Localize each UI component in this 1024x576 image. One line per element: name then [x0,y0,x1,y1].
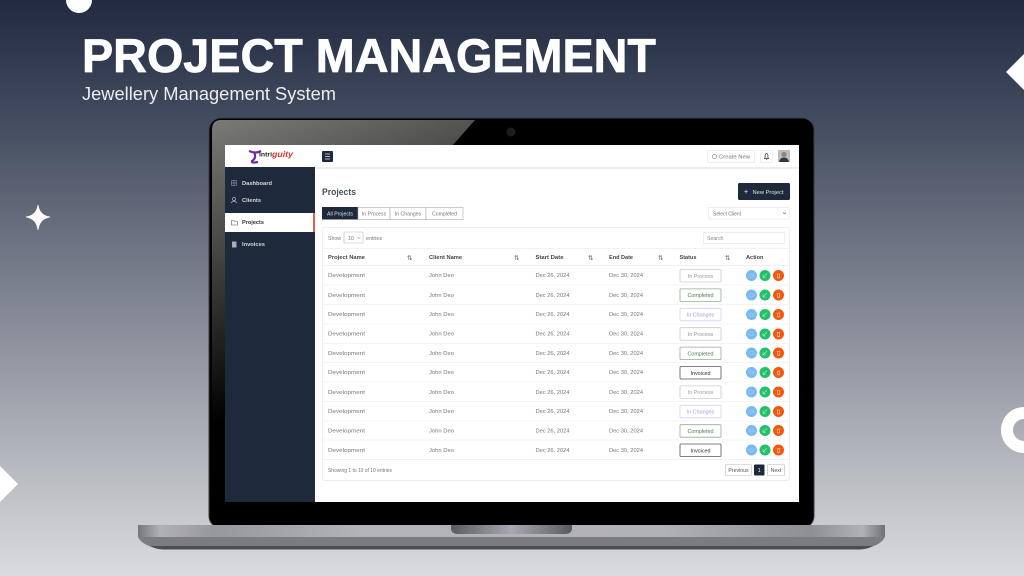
menu button [322,151,333,162]
decoration: right diamond [1006,54,1024,90]
table row 4 [323,328,789,344]
filter tabs [322,207,463,220]
filter tabs: All Projects [327,211,353,217]
table header: ⇅ [658,254,664,262]
decoration: left diamond [0,466,18,502]
pagination: Previous [728,468,749,474]
icon: sparkle [26,205,50,230]
table row 2: Completed [687,293,714,299]
table row 4: John Deo [429,332,454,338]
table row 9: Dec 30, 2024 [609,428,643,434]
table row 6: Dec 26, 2024 [536,370,570,376]
show entries: Show [328,236,341,242]
avatar [778,150,790,162]
table row 10: Dec 30, 2024 [609,448,643,454]
table row 1 [323,270,789,285]
create new button: Create New [719,154,751,160]
table row 1: Development [328,273,365,279]
table row 4: In Process [688,332,714,338]
table row 8 [323,405,789,421]
table header: Status [680,255,696,261]
pagination: 1 [758,468,761,474]
table row 5: Development [328,351,365,357]
show entries [328,232,382,243]
table row 1: John Deo [429,273,454,279]
laptop lid [209,118,814,528]
search: Search [707,236,724,242]
table row 5 [323,347,789,362]
filter tabs: In Changes [395,211,422,217]
table header: ⇅ [514,254,520,262]
table row 2: Dec 30, 2024 [609,293,643,299]
nav: invoices: Invoices [242,242,265,248]
select client: Select Client [713,211,742,217]
table header: Client Name [429,255,462,261]
table row 6: Development [328,370,365,376]
new project button: + [744,189,748,196]
table row 4: Dec 30, 2024 [609,332,643,338]
create new button [708,150,754,162]
table row 9: Development [328,428,365,434]
filter tabs: In Process [362,211,387,217]
table row 3 [323,308,789,324]
table row 4: Development [328,332,365,338]
table row 2: Development [328,293,365,299]
table card [322,228,790,480]
table row 8: Development [328,409,365,415]
table header: End Date [609,255,633,261]
pagination: Next [771,468,782,474]
new project button [738,183,790,200]
nav: dashboard: Dashboard [242,181,272,187]
show entries: 10 [348,236,354,242]
table row 7: Dec 26, 2024 [536,390,570,396]
icon: bell [760,150,772,162]
table row 8: John Deo [429,409,454,415]
table header: Project Name [328,255,365,261]
logo [249,150,294,163]
trackpad notch [451,525,572,534]
table row 9: Completed [687,429,714,435]
search [704,232,784,244]
table footer: entries count: Showing 1 to 10 of 10 entries [328,468,392,474]
select client [708,208,790,219]
table row 1: Dec 26, 2024 [536,273,570,279]
table header: ⇅ [588,254,594,262]
table row 7: John Deo [429,390,454,396]
table row 10: Dec 26, 2024 [536,448,570,454]
table row 2: John Deo [429,293,454,299]
table row 5: John Deo [429,351,454,357]
table header: ⇅ [725,254,731,262]
table header [323,248,789,266]
table row 7: Dec 30, 2024 [609,390,643,396]
new project button: New Project [752,190,784,196]
bezel gloss [212,120,475,502]
show entries: entries [366,236,382,242]
table row 10: John Deo [429,448,454,454]
title: PROJECT MANAGEMENT [82,29,656,82]
table header: Start Date [536,255,564,261]
table row 8: Dec 26, 2024 [536,409,570,415]
nav: clients [231,197,261,204]
pagination [726,464,784,476]
laptop base [138,525,885,550]
table row 6: Dec 30, 2024 [609,370,643,376]
table row 3: John Deo [429,312,454,318]
table row 5: Completed [687,351,714,357]
nav: invoices [232,242,265,248]
table row 1: In Process [688,274,714,280]
table row 7: Development [328,390,365,396]
table row 5: Dec 30, 2024 [609,351,643,357]
table row 9 [323,425,789,440]
nav: dashboard [232,180,272,187]
webcam [506,128,516,136]
table row 7: In Process [688,390,714,396]
table row 8: In Changes [687,410,715,416]
table header: ⇅ [407,254,413,262]
table row 3: Development [328,312,365,318]
table row 6: John Deo [429,370,454,376]
screen [225,145,799,502]
nav: projects active [225,213,315,232]
subtitle: Jewellery Management System [82,84,336,104]
table row 9: John Deo [429,428,454,434]
heading: projects: Projects [322,187,356,197]
logo: guity [271,150,294,159]
table row 8: Dec 30, 2024 [609,409,643,415]
table header: Action [746,255,764,261]
table row 1: Dec 30, 2024 [609,273,643,279]
top bar [225,145,799,169]
nav: clients: Clients [242,198,261,204]
table row 10 [323,444,789,460]
decoration: right ring [1007,413,1024,447]
table row 10: Invoiced [690,448,711,454]
sidebar [225,167,315,502]
table row 10: Development [328,448,365,454]
table row 4: Dec 26, 2024 [536,332,570,338]
table row 6: Invoiced [690,371,711,377]
table row 3: In Changes [687,313,715,319]
table row 3: Dec 26, 2024 [536,312,570,318]
table row 7 [323,386,789,402]
table row 2 [323,289,789,304]
table row 3: Dec 30, 2024 [609,312,643,318]
logo: intri [259,152,272,158]
nav: projects active: Projects [242,220,264,226]
table row 9: Dec 26, 2024 [536,428,570,434]
table row 5: Dec 26, 2024 [536,351,570,357]
filter tabs: Completed [432,211,457,217]
table row 2: Dec 26, 2024 [536,293,570,299]
laptop mockup [138,118,885,550]
decoration: top circle [66,0,92,13]
table row 6 [323,366,789,382]
